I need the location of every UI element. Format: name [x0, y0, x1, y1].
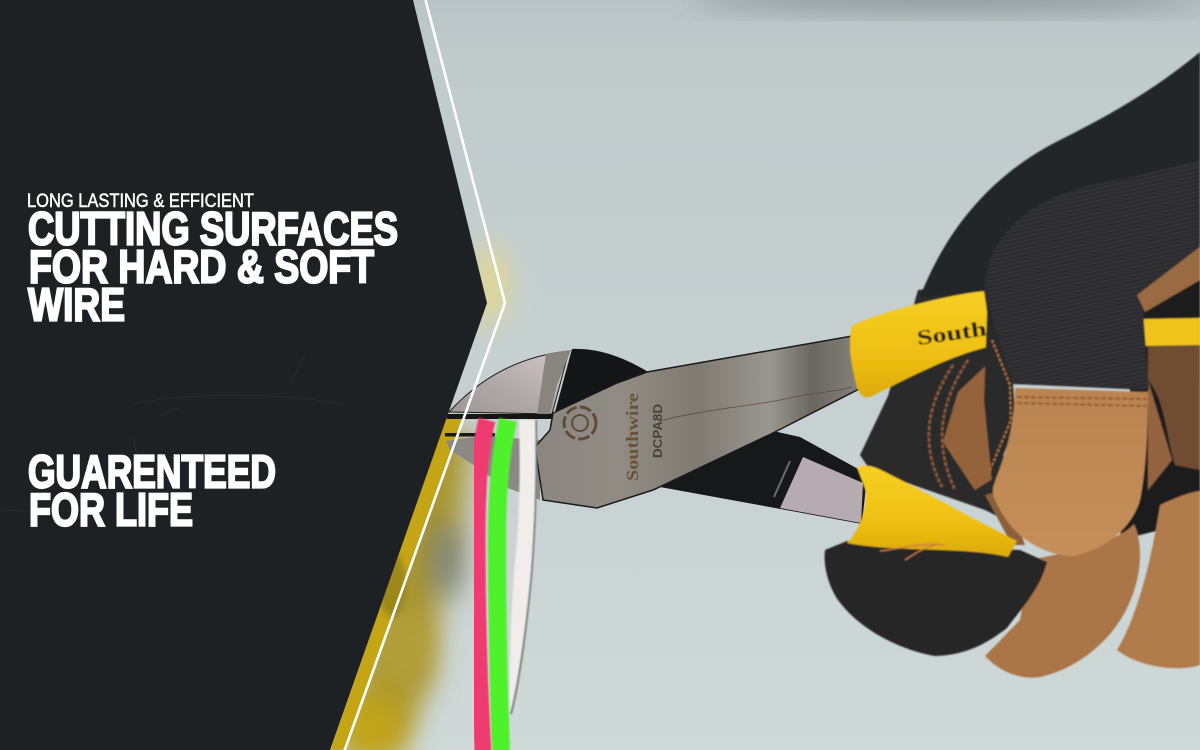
hairline crack: [660, 387, 852, 421]
black knit glove back: [920, 52, 1200, 388]
text block: cutting surfaces: [27, 191, 398, 330]
thumb stitching: [1017, 397, 1147, 406]
thumb seam: [984, 312, 1016, 482]
engraved model number: DCPA8D: [650, 404, 665, 458]
tan palm patch: [943, 360, 1004, 490]
heading lines: WIRE: [28, 278, 125, 330]
rear yellow handle: [1140, 318, 1200, 346]
green wire: [497, 420, 508, 750]
white wire: [510, 420, 535, 712]
ribbed finger: [985, 160, 1200, 390]
middle tan finger: [985, 524, 1140, 678]
pliers: [445, 335, 866, 524]
heading lines: [28, 202, 398, 330]
upper yellow handle: [850, 291, 992, 397]
blurred yellow background shapes: [330, 243, 508, 750]
black joint: [555, 349, 650, 412]
text block: guaranteed for life: [28, 446, 276, 536]
palm stitching: [929, 360, 968, 490]
heading lines: FOR HARD & SOFT: [29, 240, 374, 292]
subheading: LONG LASTING & EFFICIENT: [27, 191, 254, 212]
cutting edge shadow: [447, 414, 552, 419]
yellow strip between panel and outline: [330, 418, 462, 750]
dark region behind fingers: [1120, 260, 1200, 540]
text block: guaranteed for life: GUARENTEED: [28, 446, 276, 498]
text block: guaranteed for life: FOR LIFE: [29, 484, 193, 536]
brown gap below palm: [985, 490, 1025, 545]
tan thumb tip: [993, 388, 1148, 556]
white wire shadow edge: [511, 420, 536, 714]
engraved brand name: Southwire: [623, 392, 642, 481]
gloved hand: [825, 52, 1200, 678]
pink wire: [477, 420, 487, 750]
lower yellow handle: [847, 466, 1017, 557]
heading lines: CUTTING SURFACES: [28, 202, 398, 254]
dark back of hand: [860, 280, 1005, 520]
glove finger orange stitching: [880, 544, 945, 560]
right tan finger: [1117, 491, 1200, 668]
lower black fingertip: [825, 541, 1047, 656]
blurred dark shape at top of photo: [690, 0, 1200, 7]
silver patch on lower handle: [780, 457, 863, 523]
lower jaw behind wires: [446, 436, 540, 500]
main steel plate: [535, 335, 861, 508]
upper blade: [449, 351, 569, 414]
wires: [477, 420, 536, 750]
handle brand text: South: [915, 316, 988, 350]
brown back of hand: [1148, 345, 1200, 470]
handle highlight: [774, 461, 790, 497]
dark chevron panel: [0, 0, 487, 750]
white chevron outline: [344, 0, 505, 750]
panel scratches: [0, 355, 345, 512]
engraved logo: [564, 407, 596, 439]
tan stripe on right: [1137, 247, 1200, 312]
black lower handle: [655, 431, 866, 524]
